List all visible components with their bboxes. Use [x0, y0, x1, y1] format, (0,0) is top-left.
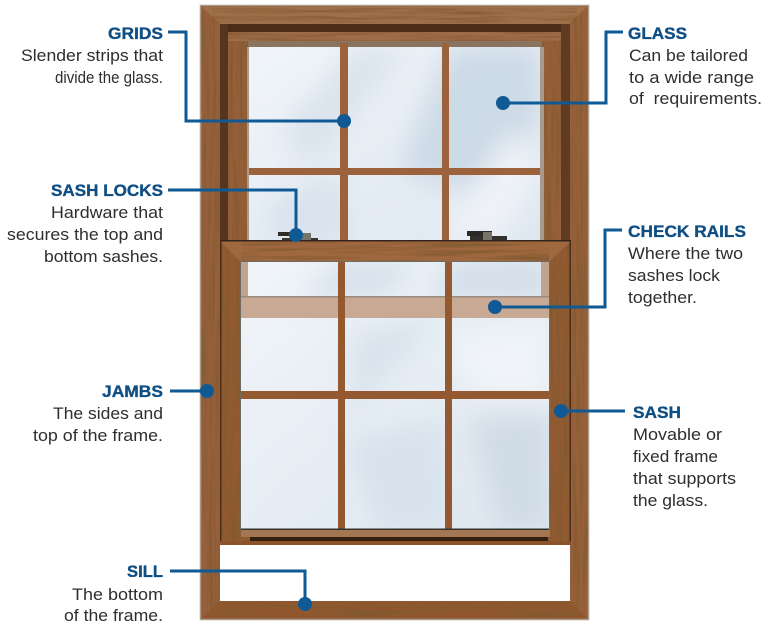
callout: sash: the glass.	[633, 492, 708, 510]
callout: sash	[554, 404, 736, 510]
sash lock: right	[467, 231, 507, 241]
callout: sash: SASH	[633, 404, 681, 422]
callout: sash locks: bottom sashes.	[44, 248, 163, 266]
callout: sash: that supports	[633, 470, 736, 488]
callout: glass	[496, 25, 762, 110]
callout: check rails: CHECK RAILS	[628, 223, 746, 241]
bottom rail	[241, 528, 549, 530]
callout: sash locks	[7, 182, 303, 266]
upper sash glass	[247, 43, 544, 241]
callout: glass: of requirements.	[629, 90, 762, 108]
sill opening	[220, 545, 570, 601]
callout: check rails: sashes lock	[628, 267, 721, 285]
callout: sill	[64, 563, 312, 625]
lower grid bars	[338, 262, 345, 529]
callout: glass: Can be tailored	[629, 47, 748, 65]
callout: sill: of the frame.	[64, 607, 163, 625]
callout: check rails: together.	[628, 289, 697, 307]
callout: grids: divide the glass.	[55, 69, 163, 87]
lower sash	[220, 240, 571, 545]
callout: glass: to a wide range	[629, 69, 754, 87]
callout: sill: The bottom	[72, 586, 163, 604]
callout: sash: fixed frame	[633, 448, 718, 466]
callout: sash locks: SASH LOCKS	[51, 182, 163, 200]
callout: check rails: Where the two	[628, 245, 743, 263]
callout: sash: Movable or	[633, 426, 723, 444]
check rail seen through glass	[241, 297, 549, 318]
sash lock: left	[278, 232, 318, 241]
callout: jambs: JAMBS	[102, 383, 163, 401]
callout: sash locks: Hardware that	[51, 204, 163, 222]
callout: jambs: top of the frame.	[33, 427, 163, 445]
callout: grids: Slender strips that	[21, 47, 163, 65]
callout: sill: SILL	[127, 563, 163, 581]
callout: jambs	[33, 383, 214, 445]
callout: grids	[21, 25, 351, 128]
window frame	[200, 5, 589, 620]
callout: grids: GRIDS	[108, 25, 163, 43]
callout: glass: GLASS	[628, 25, 687, 43]
callout: jambs: The sides and	[53, 405, 163, 423]
callout: sash locks: secures the top and	[7, 226, 163, 244]
callout: check rails	[488, 223, 746, 314]
